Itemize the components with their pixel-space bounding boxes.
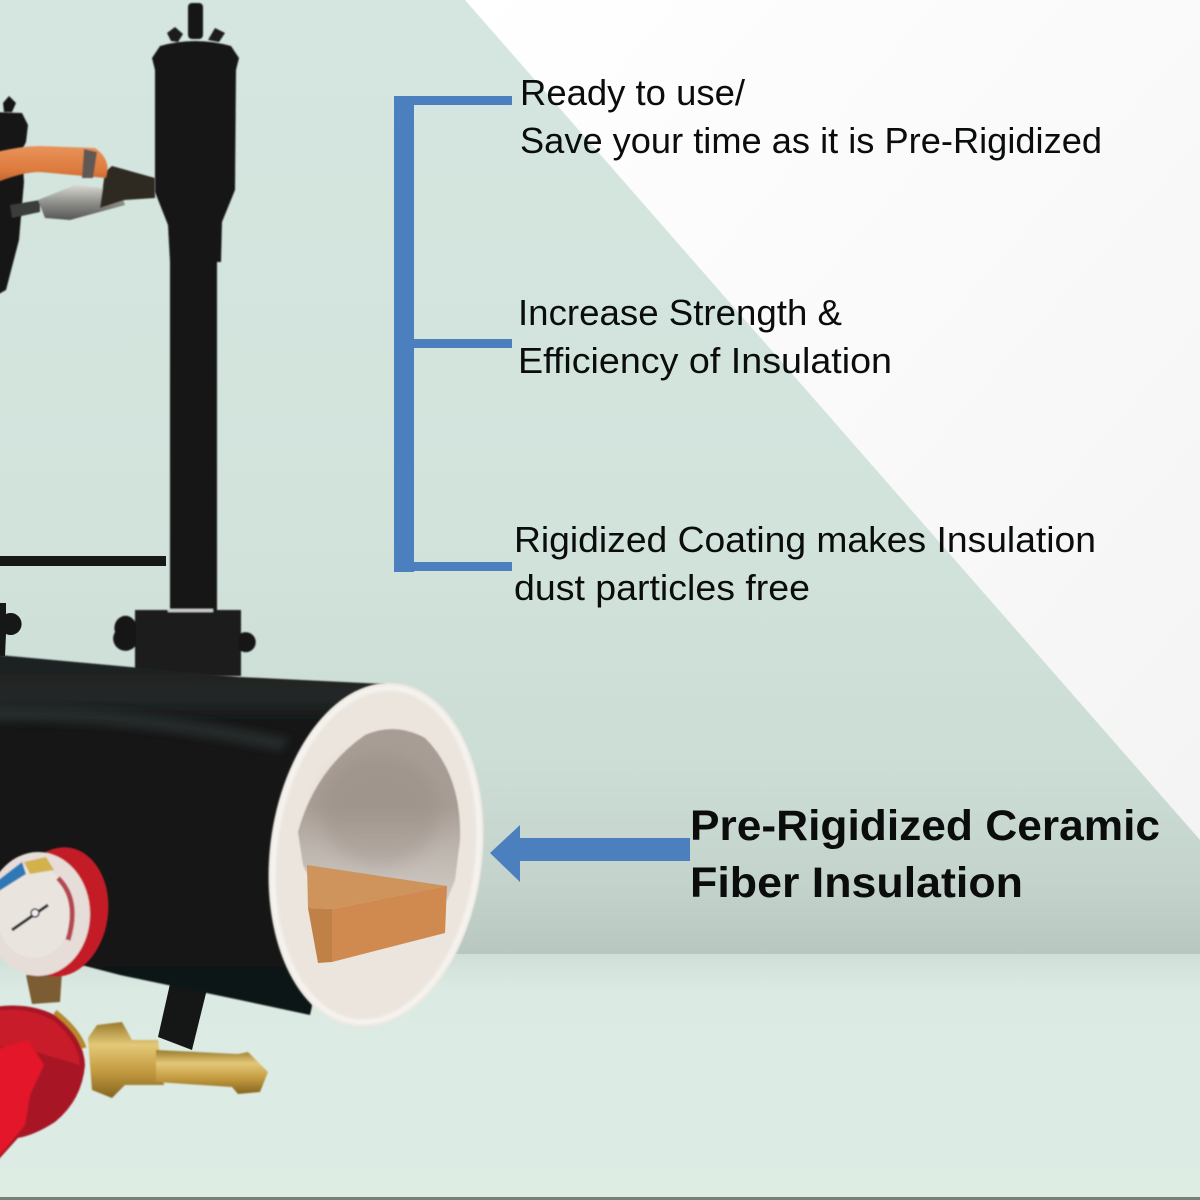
callout text: ready to use: Save your time as it is Pre-Rigidized [520, 120, 1102, 161]
inner cavity [298, 729, 460, 900]
collar highlight [168, 609, 213, 612]
callout text: coating: Rigidized Coating makes Insulation [514, 519, 1096, 560]
regulator hex bright centre [0, 1040, 44, 1165]
arrow pointing at insulation [490, 825, 690, 882]
brass hose nipple [156, 1050, 268, 1094]
brass hex nut [88, 1022, 164, 1098]
collar knobs [113, 616, 256, 652]
callout bracket [394, 96, 512, 572]
gauge red arc [58, 878, 72, 940]
gauge and regulator [0, 841, 268, 1165]
callout text: strength [518, 292, 892, 381]
product label: Pre-Rigidized Ceramic [690, 802, 1160, 850]
metal gas fitting [10, 166, 155, 220]
hose clamp [82, 149, 97, 178]
brick end face [308, 908, 332, 963]
dark brass connector into burner [100, 166, 155, 208]
regulator red body [0, 1006, 85, 1165]
callout text: coating: dust particles free [514, 567, 810, 608]
left burner partial [0, 96, 28, 300]
brick front face [332, 886, 447, 962]
ring shading [254, 676, 498, 1034]
burner cap bolts [167, 27, 225, 42]
callout text: strength: Increase Strength & [518, 292, 842, 333]
background: floor [0, 954, 1200, 1198]
product label: Fiber Insulation [690, 859, 1023, 907]
callout text: strength: Efficiency of Insulation [518, 340, 892, 381]
burner top pin [188, 3, 203, 39]
brick top face [307, 865, 447, 909]
burner collar [135, 610, 241, 676]
silver coupling [38, 185, 125, 220]
callout text: coating [514, 519, 1096, 608]
product label [690, 802, 1160, 907]
background: mint wall [0, 0, 1200, 957]
bracket middle arm [414, 339, 512, 348]
gauge needle [12, 905, 48, 930]
dark left burner body [0, 112, 28, 300]
regulator brass edge [55, 1012, 84, 1048]
gauge stem [26, 972, 62, 1004]
insulation opening [250, 670, 502, 1040]
regulator red ring [0, 1010, 80, 1065]
callout text: ready to use [520, 72, 1102, 161]
tank body [0, 654, 385, 1015]
tank support leg [158, 975, 208, 1050]
burner head [152, 41, 239, 262]
gauge red housing [3, 841, 117, 983]
orange hose [0, 146, 108, 186]
bracket top arm [394, 96, 512, 105]
callout text: ready to use: Ready to use/ [520, 72, 745, 113]
gauge face [0, 866, 72, 958]
bracket spine [394, 96, 414, 572]
gauge blue arc [0, 862, 26, 898]
gauge yellow arc [24, 857, 54, 874]
gauge centre [31, 909, 39, 917]
right burner assembly [113, 3, 256, 676]
cavity glow [320, 755, 440, 865]
background: white diagonal triangle [465, 0, 1200, 840]
left burner knob [3, 96, 16, 112]
tank highlight [0, 706, 290, 752]
left collar stub with knob [0, 603, 22, 656]
bracket bottom arm [394, 562, 512, 571]
left thin pipe [10, 200, 40, 218]
white fiber ring [250, 670, 502, 1040]
horizontal rod [0, 556, 166, 566]
gauge rim [0, 852, 90, 976]
burner tube [170, 258, 217, 613]
background: bottom edge strip [0, 1197, 1200, 1200]
